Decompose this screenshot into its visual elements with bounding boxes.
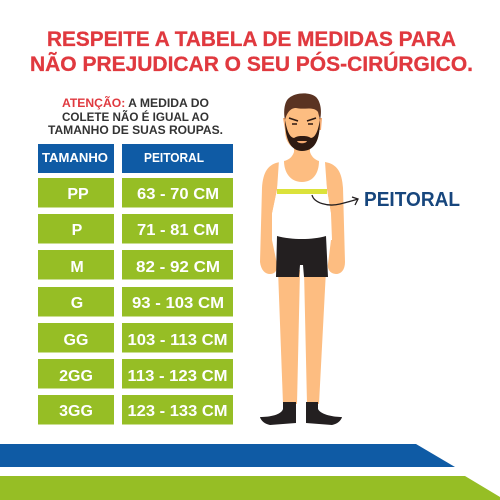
table header [38, 144, 233, 173]
tank top [272, 160, 332, 240]
eyes and brows [289, 118, 316, 124]
row G: G [71, 295, 83, 312]
row GG: GG [64, 332, 88, 349]
row M: M [70, 259, 84, 276]
row GG [38, 323, 233, 352]
face [285, 105, 319, 150]
title: RESPEITE A TABELA DE MEDIDAS PARA [47, 28, 456, 51]
row PP: PP [67, 186, 89, 203]
row GG: 103 - 113 CM [128, 332, 228, 349]
row 2GG: 113 - 123 CM [128, 368, 228, 385]
row 2GG [38, 359, 233, 388]
row PP: 63 - 70 CM [137, 186, 219, 203]
row G [38, 287, 233, 316]
beard [285, 120, 320, 151]
attention note: TAMANHO DE SUAS ROUPAS. [48, 125, 223, 137]
socks and shoes [260, 402, 342, 425]
size table [38, 144, 233, 424]
row 3GG: 3GG [59, 403, 93, 420]
curved arrow [312, 195, 358, 205]
peitoral label: PEITORAL [364, 189, 460, 211]
row 3GG: 123 - 133 CM [128, 403, 228, 420]
mouth [297, 141, 307, 143]
hair [284, 93, 321, 120]
row M [38, 250, 233, 280]
row G: 93 - 103 CM [132, 295, 224, 312]
man figure [260, 93, 345, 425]
ears [283, 118, 322, 130]
table header: PEITORAL [144, 150, 204, 165]
legs [278, 270, 326, 404]
title [30, 28, 473, 76]
attention note: ATENÇÃO: A MEDIDA DO [62, 97, 209, 110]
title: NÃO PREJUDICAR O SEU PÓS-CIRÚRGICO. [30, 52, 473, 76]
arms [260, 162, 345, 274]
attention note: COLETE NÃO É IGUAL AO [62, 111, 209, 124]
row P: 71 - 81 CM [137, 222, 219, 239]
attention note [48, 97, 223, 137]
row PP [38, 178, 233, 208]
row M: 82 - 92 CM [136, 259, 220, 276]
neck and chest skin [284, 140, 319, 182]
footer blue stripe [0, 444, 455, 467]
table header: TAMANHO [42, 150, 108, 165]
footer green stripe [0, 476, 500, 500]
row 2GG: 2GG [59, 368, 93, 385]
row 3GG [38, 395, 233, 424]
row P [38, 214, 233, 244]
chest measuring band [277, 189, 327, 194]
row P: P [72, 222, 83, 239]
shorts [276, 236, 328, 277]
